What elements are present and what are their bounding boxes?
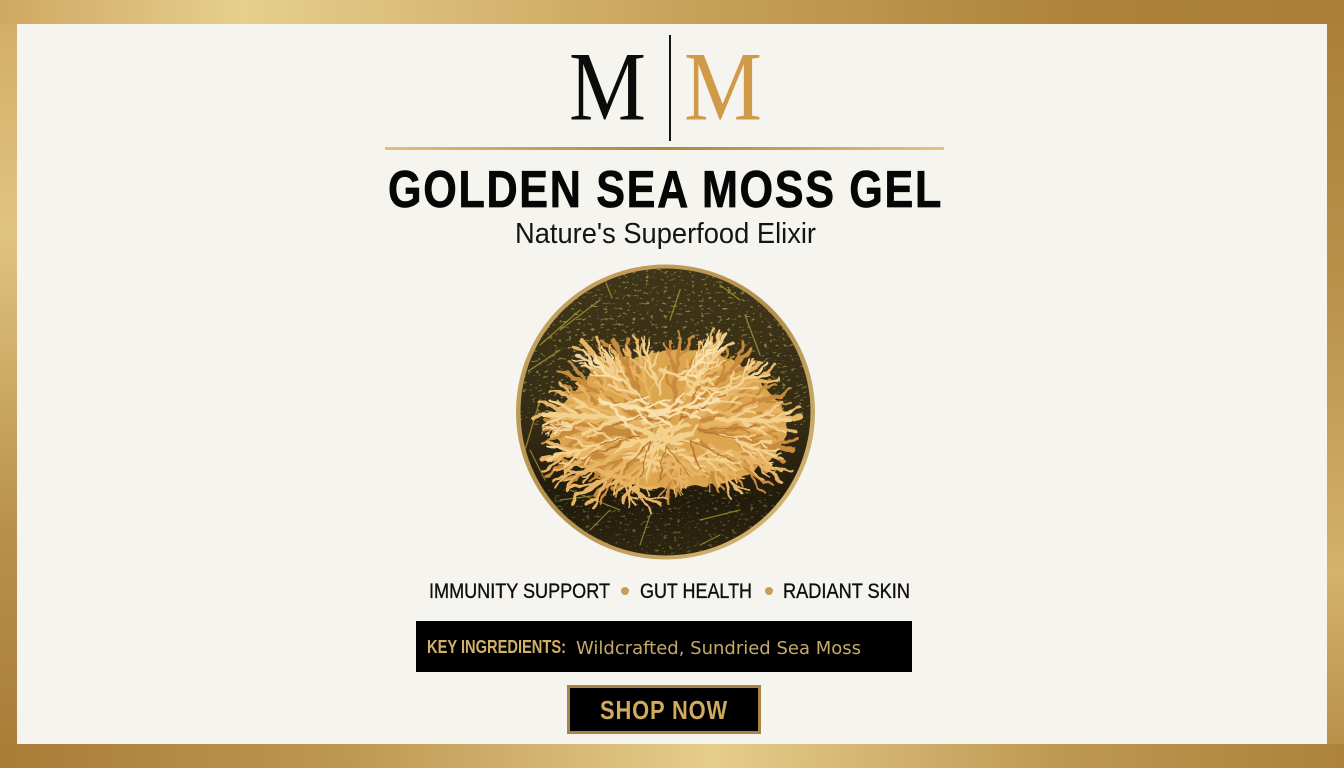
benefit: gut health: GUT HEALTH [640, 580, 752, 603]
key ingredients label: KEY INGREDIENTS: [427, 637, 566, 657]
logo: M | M monogram: M [569, 32, 646, 142]
moss branches [531, 326, 803, 517]
sea moss cluster [531, 326, 803, 517]
orange shadow strands [580, 385, 760, 480]
benefit: immunity support: IMMUNITY SUPPORT [429, 580, 610, 603]
separator dot [765, 587, 773, 595]
separator dot [621, 587, 629, 595]
shop now button: SHOP NOW [600, 695, 728, 725]
moss base mass [551, 349, 787, 489]
gold scratches on disc [525, 283, 760, 545]
subtitle: Nature's Superfood Elixir [515, 218, 816, 250]
benefits row [429, 580, 910, 603]
ingredients text: Wildcrafted, Sundried Sea Moss [576, 638, 861, 659]
key ingredients bar [416, 621, 912, 672]
logo: M | M monogram: M [684, 32, 762, 142]
shop now button [568, 686, 760, 732]
gold speckle texture [516, 265, 816, 560]
dark textured disc [520, 268, 810, 556]
gold ring [516, 264, 815, 560]
gold rule under logo [385, 147, 944, 150]
image: golden sea moss in round gold frame [516, 264, 816, 560]
benefit: radiant skin: RADIANT SKIN [783, 580, 910, 603]
title: GOLDEN SEA MOSS GEL [388, 161, 943, 219]
logo: M | M monogram [569, 32, 762, 142]
